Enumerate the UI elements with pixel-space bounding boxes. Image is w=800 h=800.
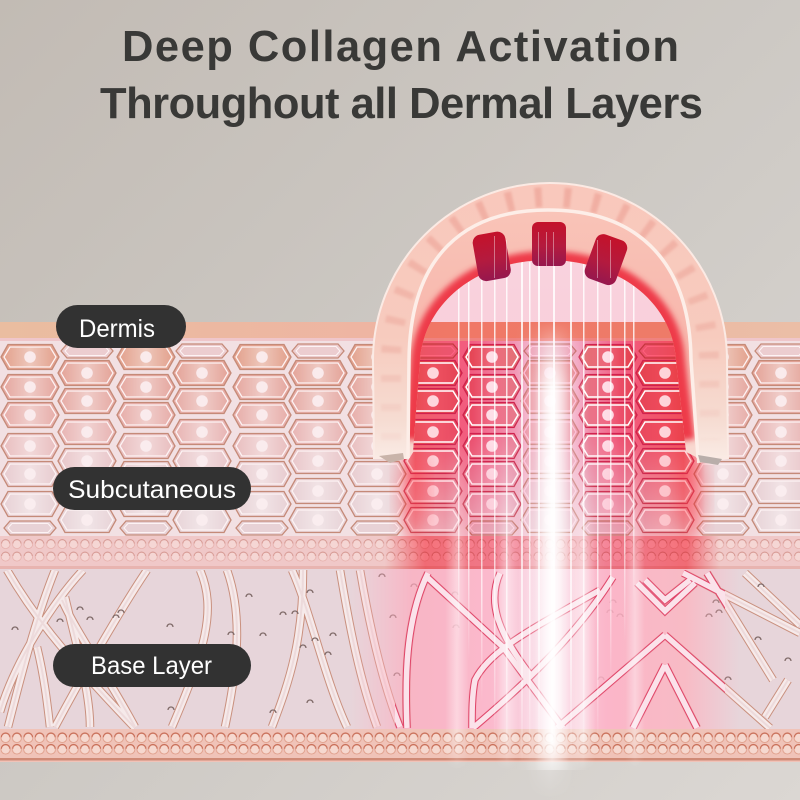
dermis top band <box>0 322 800 341</box>
central beam glow <box>518 330 588 770</box>
side beam haze <box>445 430 645 770</box>
lit cell outlines <box>404 344 694 532</box>
label: Base Layer: Base Layer <box>91 652 212 680</box>
light beams <box>518 324 588 772</box>
LED light streaks <box>494 232 611 278</box>
label: Dermis: Dermis <box>79 315 155 343</box>
red light glow over skin <box>360 322 732 729</box>
dermis and subcutaneous cell layer <box>0 341 800 537</box>
LED right <box>582 232 629 287</box>
title: Deep Collagen Activation <box>122 23 679 71</box>
LED centre <box>532 222 566 266</box>
dermis band tint <box>400 322 705 341</box>
label: Dermis <box>56 305 186 348</box>
front band <box>408 210 698 458</box>
base layer fibres <box>0 569 800 729</box>
lower bubble band <box>0 729 800 762</box>
title: Throughout all Dermal Layers <box>100 80 703 128</box>
label: Subcutaneous <box>53 467 251 510</box>
metal tip left <box>379 453 404 463</box>
white rim <box>408 210 698 458</box>
device: U-shaped red light mask <box>373 183 728 465</box>
ribs <box>391 197 710 440</box>
front band red inner shadow <box>413 260 686 440</box>
thin beams <box>458 262 634 762</box>
metal tip right <box>698 455 722 465</box>
skin cross-section <box>0 322 800 762</box>
title <box>100 23 703 128</box>
back ribbed band <box>373 183 728 462</box>
upper bubble band <box>0 536 800 569</box>
light cone inside device opening <box>413 260 686 452</box>
LED left <box>471 230 512 282</box>
label: Base Layer <box>53 644 251 687</box>
label: Subcutaneous: Subcutaneous <box>68 476 236 504</box>
lit fibres <box>395 570 725 729</box>
